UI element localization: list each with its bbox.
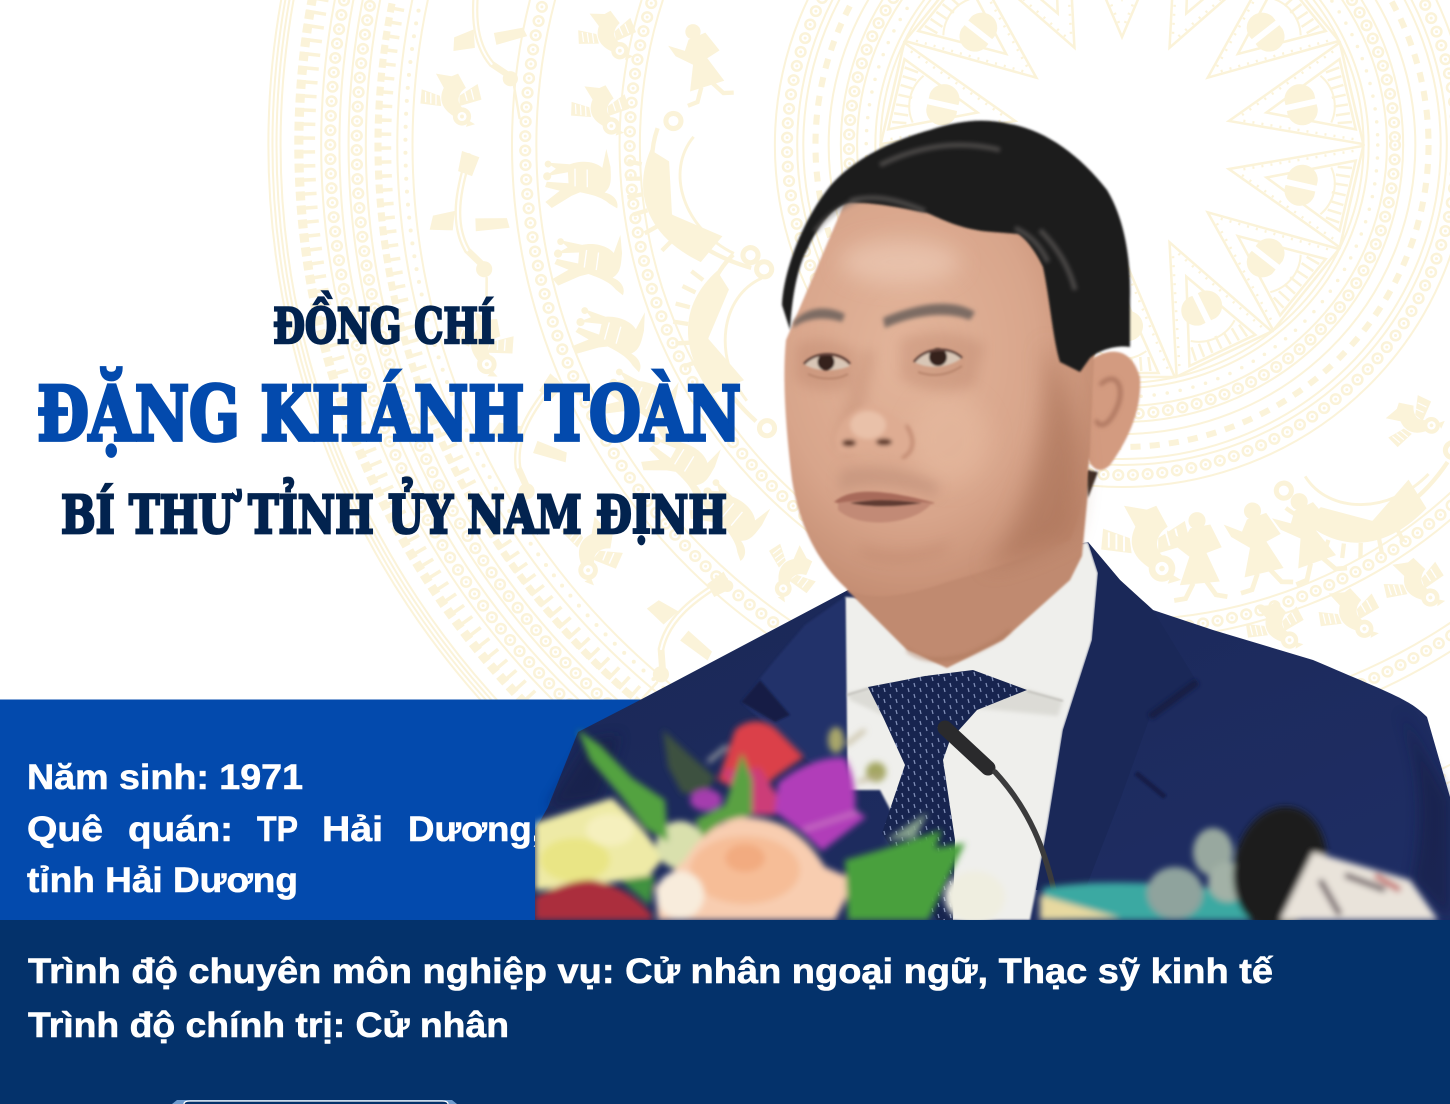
text: professional qualification: Trình độ chuyên môn nghiệp vụ: Cử nhân ngoại ngữ, Thạc sỹ kinh tế bbox=[28, 952, 1274, 991]
eyebrow left bbox=[793, 308, 845, 328]
microphone stalk bbox=[945, 728, 1055, 895]
collar edge bbox=[847, 688, 1063, 701]
leaf green upper bbox=[578, 730, 668, 842]
eyebrow right bbox=[883, 304, 975, 328]
buds on shirt bbox=[828, 727, 844, 753]
necktie bbox=[868, 670, 1027, 920]
red petal bbox=[718, 721, 804, 790]
suit lapel right bbox=[1036, 542, 1154, 890]
green leaf low bbox=[620, 875, 655, 905]
breast pocket bbox=[1136, 773, 1165, 797]
text: political qualification: Trình độ chính trị: Cử nhân bbox=[28, 1006, 509, 1045]
text: hometown line one: Hải bbox=[322, 810, 383, 849]
forehead highlight bbox=[840, 240, 960, 284]
suit shading bbox=[547, 739, 1450, 912]
text: birth year: Năm sinh: 1971 bbox=[27, 758, 303, 797]
white buds bbox=[945, 871, 1005, 923]
small purple bbox=[690, 789, 722, 811]
broadcast mic cube bbox=[1280, 852, 1438, 920]
text: hometown line one: Quê bbox=[27, 810, 103, 849]
neck bbox=[847, 470, 1090, 668]
pale buds bbox=[1193, 828, 1233, 876]
background: drum animal motifs bbox=[420, 0, 1450, 718]
peach rose bbox=[655, 817, 855, 920]
flower arrangement bbox=[535, 721, 1438, 938]
background: bronze drum pattern bbox=[268, 0, 1450, 986]
panel: qualifications band bbox=[0, 920, 1450, 1104]
microphone foam bbox=[1229, 802, 1330, 920]
head bbox=[782, 121, 1140, 596]
dark red bloom bbox=[535, 880, 652, 920]
nose side shadow bbox=[836, 350, 875, 455]
text: hometown line one: quán: bbox=[128, 810, 233, 849]
leaf dark bbox=[663, 730, 715, 795]
face bbox=[784, 190, 1095, 596]
mouth bbox=[834, 492, 935, 523]
neck fold bbox=[907, 630, 1010, 660]
tab: cropped bottom element bbox=[172, 1100, 457, 1104]
cheek highlight bbox=[910, 395, 990, 485]
shadow behind ear bbox=[1087, 470, 1098, 498]
teal bowl bbox=[1043, 883, 1280, 920]
shirt shadow bbox=[848, 688, 1062, 716]
suit clip bbox=[708, 746, 727, 762]
mustache shadow bbox=[838, 466, 940, 497]
hair highlights bbox=[815, 145, 1075, 290]
grey leaf bbox=[886, 812, 928, 840]
ear bbox=[1085, 352, 1140, 470]
eye left bbox=[804, 354, 850, 378]
yellow bloom bbox=[535, 798, 662, 890]
text: hometown line one: Dương, bbox=[408, 810, 542, 849]
suit jacket bbox=[535, 542, 1450, 920]
panel: personal details band bbox=[0, 700, 700, 920]
pink petal bbox=[722, 768, 780, 815]
heading: leader name: ĐẶNG KHÁNH TOÀN bbox=[37, 368, 741, 458]
fern green lower bbox=[845, 830, 965, 920]
heading: position: BÍ THƯ TỈNH ỦY NAM ĐỊNH bbox=[61, 478, 727, 546]
suit lapel left bbox=[746, 597, 848, 770]
hair bbox=[782, 121, 1130, 372]
pale blossom centre bbox=[656, 821, 704, 869]
purple bloom bbox=[775, 758, 866, 851]
eye right bbox=[914, 348, 962, 375]
shirt and collar bbox=[845, 542, 1098, 920]
text: hometown line one: TP bbox=[257, 810, 298, 849]
eye socket shading bbox=[795, 332, 985, 391]
text: hometown line two: tỉnh Hải Dương bbox=[27, 861, 298, 900]
facial shading right bbox=[985, 340, 1079, 568]
photo: portrait of speaker at lectern bbox=[535, 121, 1450, 938]
nose bbox=[835, 405, 912, 458]
green stem bbox=[695, 753, 752, 838]
heading: title line one: ĐỒNG CHÍ bbox=[273, 291, 495, 355]
lapel notch bbox=[1150, 682, 1197, 717]
chin shadow bbox=[860, 540, 950, 562]
